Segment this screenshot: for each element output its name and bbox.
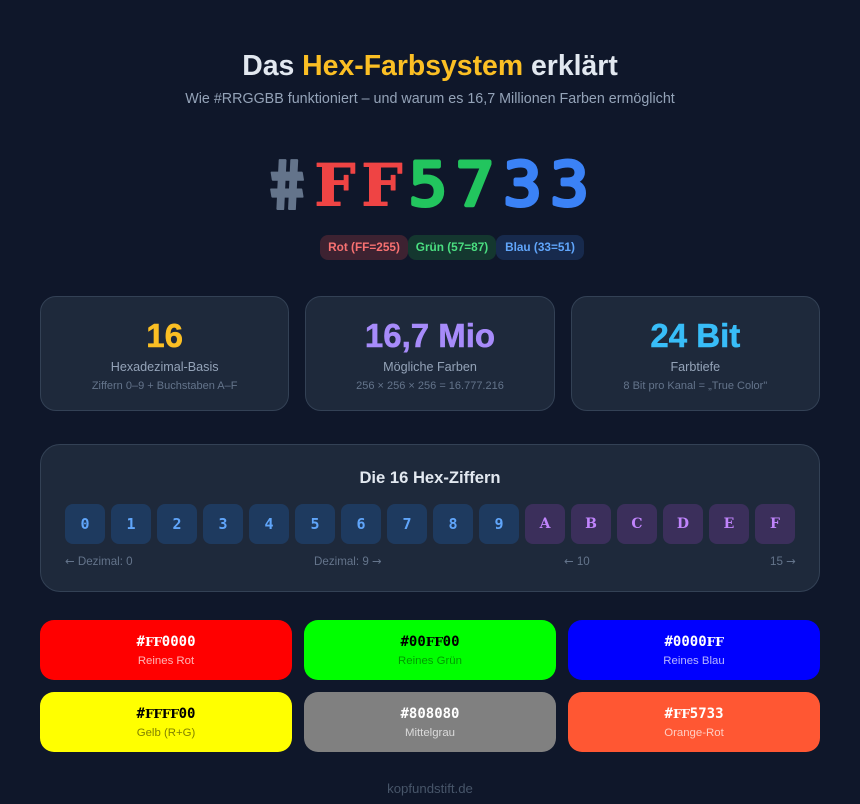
digit 1: 1 xyxy=(126,515,136,533)
code: # 00 xyxy=(136,706,195,722)
digit 5: 5 xyxy=(310,515,320,533)
digit 8 xyxy=(433,504,473,544)
swatch: blue xyxy=(568,620,820,680)
digit 9: 9 xyxy=(494,515,504,533)
name: Mittelgrau xyxy=(405,727,455,739)
code: F xyxy=(715,634,724,649)
digit D xyxy=(663,504,703,544)
digit B xyxy=(571,504,611,544)
name: Reines Rot xyxy=(138,655,194,667)
subtitle: Wie #RRGGBB funktioniert – und warum es 16,7 Millionen Farben ermöglicht xyxy=(185,91,675,107)
name: Reines Grün xyxy=(398,655,462,667)
digit 3 xyxy=(203,504,243,544)
digit 1 xyxy=(111,504,151,544)
note: 8 Bit pro Kanal = „True Color" xyxy=(623,380,767,392)
code: #00 00 xyxy=(400,634,460,650)
panel heading: Die 16 Hex-Ziffern xyxy=(359,468,501,487)
channel badges xyxy=(320,235,584,260)
badge: red: Rot (FF=255) xyxy=(328,240,400,254)
blue pair: 3 xyxy=(503,150,542,220)
digit 0 xyxy=(65,504,105,544)
swatch: orange-red xyxy=(568,692,820,752)
digit F xyxy=(755,504,795,544)
stat card: base xyxy=(40,296,289,411)
hash sign: # xyxy=(264,146,311,225)
badge: blue: Blau (33=51) xyxy=(505,240,575,254)
value: 16,7 Mio xyxy=(365,317,495,354)
value: 16 xyxy=(146,317,183,354)
digit A: A xyxy=(540,516,550,532)
note: 10: ← 10 xyxy=(564,554,590,568)
name: Gelb (R+G) xyxy=(137,727,195,739)
blue pair xyxy=(503,150,589,220)
green pair: 7 xyxy=(456,150,494,220)
digit 5 xyxy=(295,504,335,544)
note: 256 × 256 × 256 = 16.777.216 xyxy=(356,380,504,392)
code: F xyxy=(434,634,443,649)
red pair: F xyxy=(361,152,403,220)
code: F xyxy=(145,634,154,649)
footer: kopfundstift.de xyxy=(387,781,473,796)
code: F xyxy=(681,706,690,721)
badge: blue xyxy=(496,235,584,260)
swatch: yellow xyxy=(40,692,292,752)
digit 2: 2 xyxy=(172,515,182,533)
hex code display xyxy=(264,146,589,225)
digit 2 xyxy=(157,504,197,544)
digit 6 xyxy=(341,504,381,544)
digit 7: 7 xyxy=(402,515,412,533)
note: 15: 15 → xyxy=(770,554,796,568)
green pair xyxy=(409,150,494,220)
panel: hex digits xyxy=(40,444,820,592)
code: F xyxy=(153,634,162,649)
code: F xyxy=(170,706,179,721)
blue pair: 3 xyxy=(550,150,589,220)
digit 9 xyxy=(479,504,519,544)
digit 0: 0 xyxy=(80,515,90,533)
badge: red xyxy=(320,235,408,260)
digit C xyxy=(617,504,657,544)
digit E: E xyxy=(724,516,734,532)
code: F xyxy=(162,706,171,721)
label: Mögliche Farben xyxy=(383,360,477,374)
name: Orange-Rot xyxy=(664,727,724,739)
digit F: F xyxy=(770,516,780,532)
swatch: grey xyxy=(304,692,556,752)
code: F xyxy=(673,706,682,721)
digit 4: 4 xyxy=(264,515,274,533)
name: Reines Blau xyxy=(663,655,725,667)
swatch: red xyxy=(40,620,292,680)
code: #808080 xyxy=(400,706,460,722)
note: Ziffern 0–9 + Buchstaben A–F xyxy=(92,380,237,392)
swatch: green xyxy=(304,620,556,680)
digit cells xyxy=(65,504,795,544)
code: #0000 xyxy=(664,634,707,650)
digit 8: 8 xyxy=(448,515,458,533)
badge: green: Grün (57=87) xyxy=(416,240,488,254)
code: F xyxy=(153,706,162,721)
digit E xyxy=(709,504,749,544)
digit B: B xyxy=(585,516,597,532)
digit C: C xyxy=(631,516,643,532)
digit D: D xyxy=(677,516,689,532)
green pair: 5 xyxy=(409,150,447,220)
note: decimal 9: Dezimal: 9 → xyxy=(314,554,382,568)
value: 24 Bit xyxy=(650,317,740,354)
digit 7 xyxy=(387,504,427,544)
code: # 5733 xyxy=(664,706,724,722)
stat card: colours xyxy=(305,296,555,411)
stat card: depth xyxy=(571,296,820,411)
digit 6: 6 xyxy=(356,515,366,533)
code: F xyxy=(145,706,154,721)
digit 4 xyxy=(249,504,289,544)
label: Farbtiefe xyxy=(670,360,720,374)
code: F xyxy=(426,634,435,649)
digit A xyxy=(525,504,565,544)
digit 3: 3 xyxy=(218,515,228,533)
code: F xyxy=(707,634,716,649)
red pair: F xyxy=(314,152,356,220)
title: Das Hex-Farbsystem erklärt xyxy=(242,50,618,82)
label: Hexadezimal-Basis xyxy=(111,360,219,374)
badge: green xyxy=(408,235,496,260)
note: decimal 0: ← Dezimal: 0 xyxy=(65,554,133,568)
red pair xyxy=(314,152,403,220)
code: # 0000 xyxy=(136,634,196,650)
